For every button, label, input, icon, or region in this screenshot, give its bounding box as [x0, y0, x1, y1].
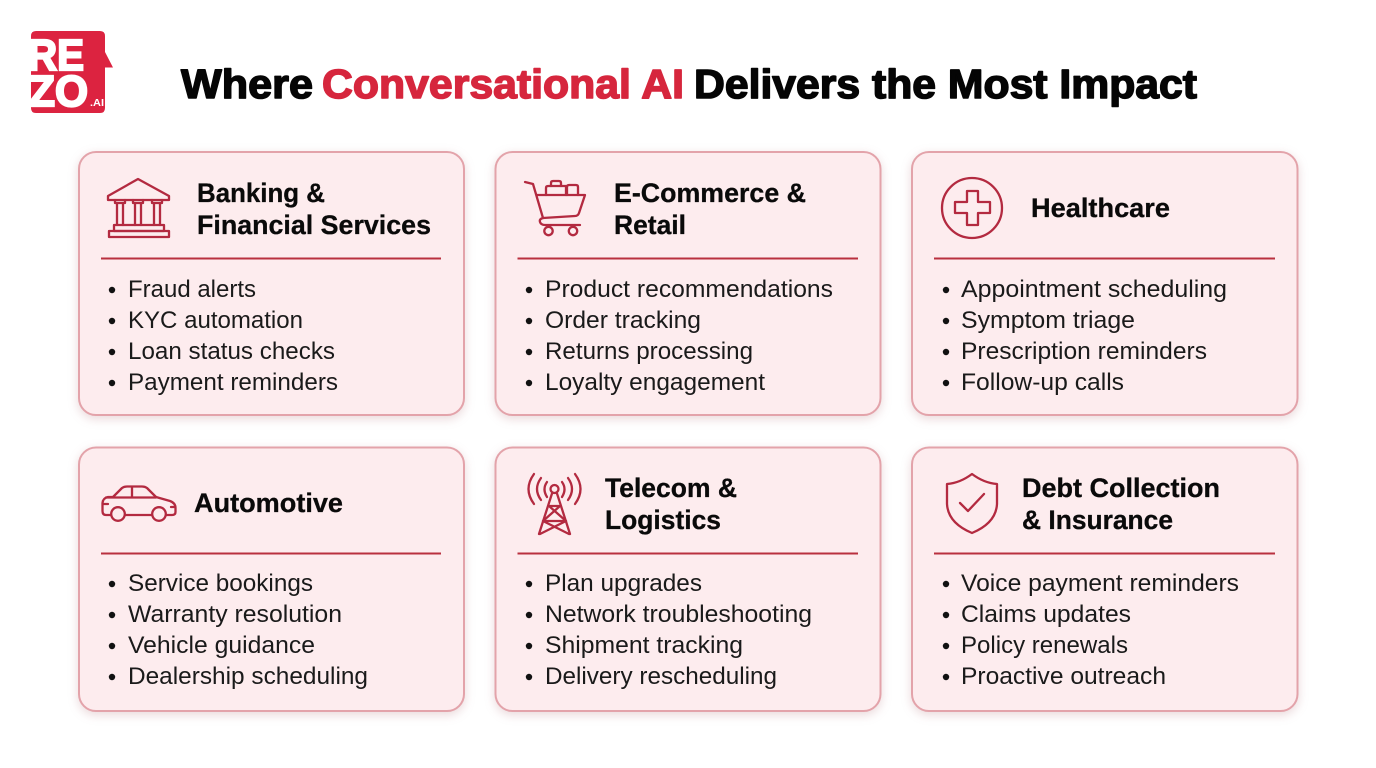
title [181, 61, 1197, 107]
heading: banking: Banking & [197, 178, 325, 208]
panel: healthcare [912, 152, 1298, 415]
panel: banking and financial services [79, 152, 464, 415]
logo: REZO.AI [28, 31, 113, 116]
list: e-commerce: Order tracking [545, 307, 701, 334]
heading: e-commerce [614, 178, 806, 240]
list: debt collection: Voice payment reminders [961, 570, 1239, 597]
heading: automotive: Automotive [194, 488, 343, 518]
heading: debt collection: Debt Collection [1022, 473, 1220, 503]
icon: bank building [108, 179, 169, 237]
logo: REZO.AI: .AI [90, 98, 104, 109]
list: telecom: Plan upgrades [545, 570, 702, 597]
list: healthcare: Symptom triage [961, 307, 1135, 334]
list: debt collection: Policy renewals [961, 632, 1128, 659]
list: e-commerce: Loyalty engagement [545, 369, 765, 396]
panel: automotive [79, 448, 464, 711]
list: banking: Loan status checks [128, 338, 335, 365]
list: debt collection: Claims updates [961, 601, 1131, 628]
list: healthcare: Follow-up calls [961, 369, 1124, 396]
list: automotive: Service bookings [128, 570, 313, 597]
title: Where [181, 61, 313, 107]
logo: REZO.AI: ZO [29, 67, 88, 116]
list: debt collection: Proactive outreach [961, 663, 1166, 690]
list: healthcare: Prescription reminders [961, 338, 1207, 365]
heading: telecom [605, 473, 737, 535]
list: automotive: Vehicle guidance [128, 632, 315, 659]
list: healthcare [943, 276, 1227, 396]
list: banking: Payment reminders [128, 369, 338, 396]
heading: telecom: Logistics [605, 505, 721, 535]
list: debt collection [943, 570, 1239, 690]
title: Delivers the Most Impact [694, 61, 1197, 107]
heading: debt collection [1022, 473, 1220, 535]
list: banking: Fraud alerts [128, 276, 256, 303]
icon: medical cross [942, 178, 1002, 238]
list: banking [109, 276, 338, 396]
panel: telecom and logistics [496, 448, 880, 711]
icon: signal tower [528, 474, 580, 534]
list: healthcare: Appointment scheduling [961, 276, 1227, 303]
list: automotive [109, 570, 368, 690]
list: telecom: Shipment tracking [545, 632, 743, 659]
heading: healthcare: Healthcare [1031, 193, 1170, 223]
list: e-commerce [526, 276, 833, 396]
title: Conversational AI [322, 61, 684, 107]
heading: debt collection: & Insurance [1022, 505, 1173, 535]
panel: debt collection and insurance [912, 448, 1298, 711]
icon: shopping cart [525, 181, 585, 235]
icon: shield with check [947, 474, 997, 533]
logo: REZO.AI: RE [28, 31, 84, 80]
list: e-commerce: Returns processing [545, 338, 753, 365]
heading: banking: Financial Services [197, 210, 431, 240]
heading: e-commerce: E-Commerce & [614, 178, 806, 208]
list: automotive: Warranty resolution [128, 601, 342, 628]
icon: car [102, 486, 176, 521]
list: telecom: Network troubleshooting [545, 601, 812, 628]
list: banking: KYC automation [128, 307, 303, 334]
list: telecom: Delivery rescheduling [545, 663, 777, 690]
heading: banking [197, 178, 431, 240]
list: telecom [526, 570, 812, 690]
heading: telecom: Telecom & [605, 473, 737, 503]
list: automotive: Dealership scheduling [128, 663, 368, 690]
list: e-commerce: Product recommendations [545, 276, 833, 303]
heading: e-commerce: Retail [614, 210, 686, 240]
panel: e-commerce and retail [496, 152, 880, 415]
